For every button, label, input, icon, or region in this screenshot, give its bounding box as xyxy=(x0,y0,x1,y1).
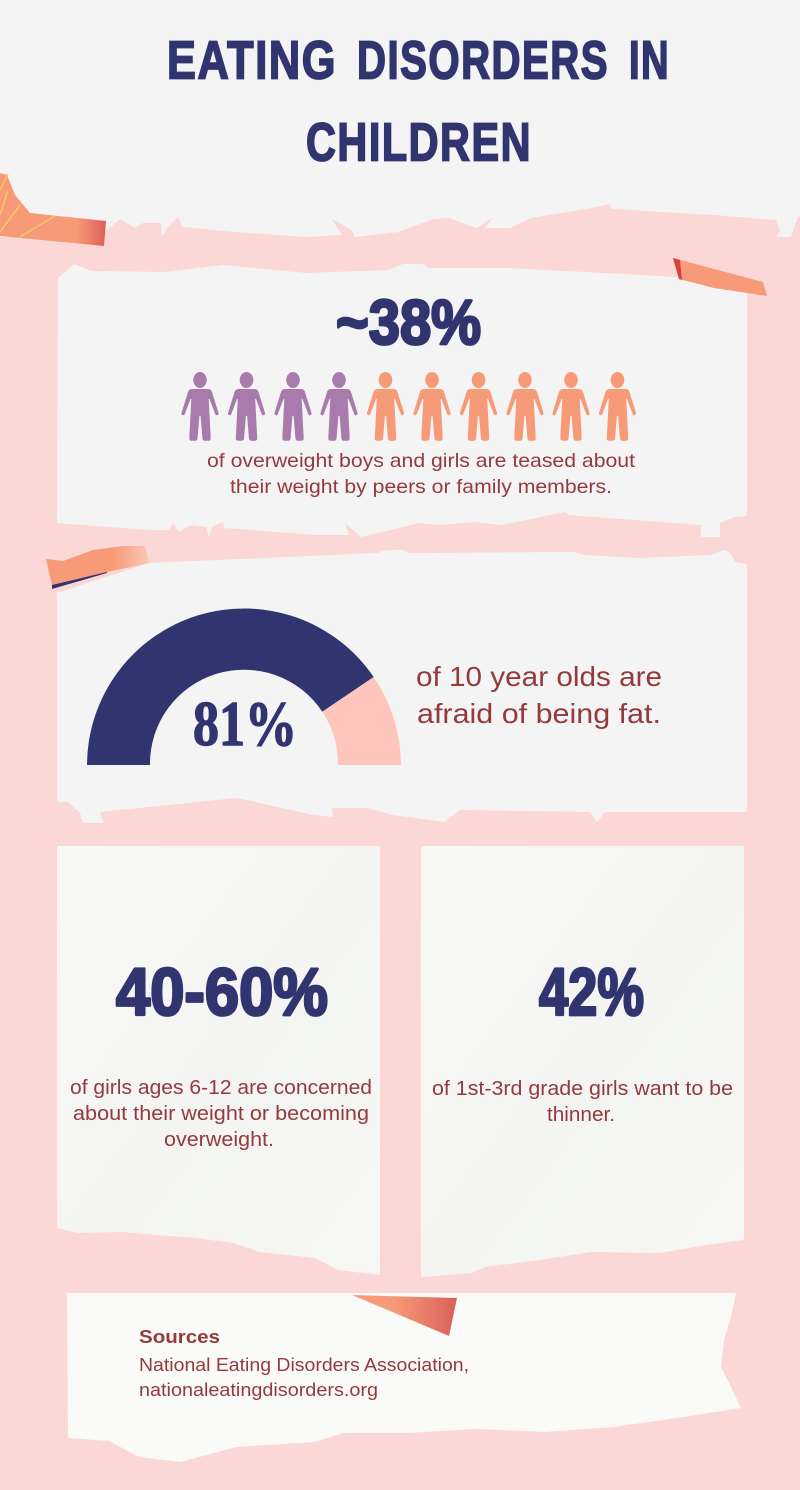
caption: want to be thinner xyxy=(432,1078,733,1126)
stat: about 38%: ~38% xyxy=(336,288,481,358)
caption: teasing: of overweight boys and girls are teased about xyxy=(207,450,636,472)
sources text xyxy=(139,1355,469,1400)
stat: 40-60%: 40-60% xyxy=(116,955,328,1030)
title: DISORDERS xyxy=(357,30,609,90)
caption: afraid of being fat: afraid of being fat. xyxy=(417,698,661,729)
title: CHILDREN xyxy=(306,112,532,172)
gauge chart xyxy=(87,608,401,765)
caption: concerned about weight: overweight. xyxy=(164,1129,274,1151)
decorative tape: header xyxy=(0,173,106,246)
title: EATING xyxy=(167,30,337,90)
stat: 42%: 42% xyxy=(539,955,644,1030)
panel: 81% statistic xyxy=(46,546,747,823)
title xyxy=(167,30,670,172)
sources text: National Eating Disorders Association, xyxy=(139,1355,469,1375)
caption: concerned about weight: of girls ages 6-12 are concerned xyxy=(70,1077,372,1099)
tape: triangle xyxy=(352,1295,457,1336)
tape: wavy xyxy=(46,546,149,589)
caption: afraid of being fat xyxy=(416,661,662,729)
panel: 42% card xyxy=(421,846,744,1277)
pictogram: orange people xyxy=(367,372,636,441)
gauge value: 81% xyxy=(193,688,297,759)
caption: teasing: their weight by peers or family members. xyxy=(230,476,612,498)
caption: want to be thinner: thinner. xyxy=(547,1104,615,1126)
caption: teasing xyxy=(207,450,636,498)
panel: 40-60% card xyxy=(57,846,380,1275)
caption: afraid of being fat: of 10 year olds are xyxy=(416,661,662,692)
tape: panel corner xyxy=(673,258,767,296)
caption: concerned about weight xyxy=(70,1077,372,1151)
sources text: nationaleatingdisorders.org xyxy=(139,1380,378,1400)
sources heading: Sources xyxy=(139,1327,220,1347)
caption: concerned about weight: about their weight or becoming xyxy=(73,1103,369,1125)
pictogram: purple people xyxy=(181,372,358,441)
header panel xyxy=(0,0,800,237)
caption: want to be thinner: of 1st-3rd grade girls want to be xyxy=(432,1078,733,1100)
title: IN xyxy=(629,30,670,90)
panel: 38% statistic xyxy=(57,258,767,537)
panel: sources xyxy=(67,1293,741,1462)
